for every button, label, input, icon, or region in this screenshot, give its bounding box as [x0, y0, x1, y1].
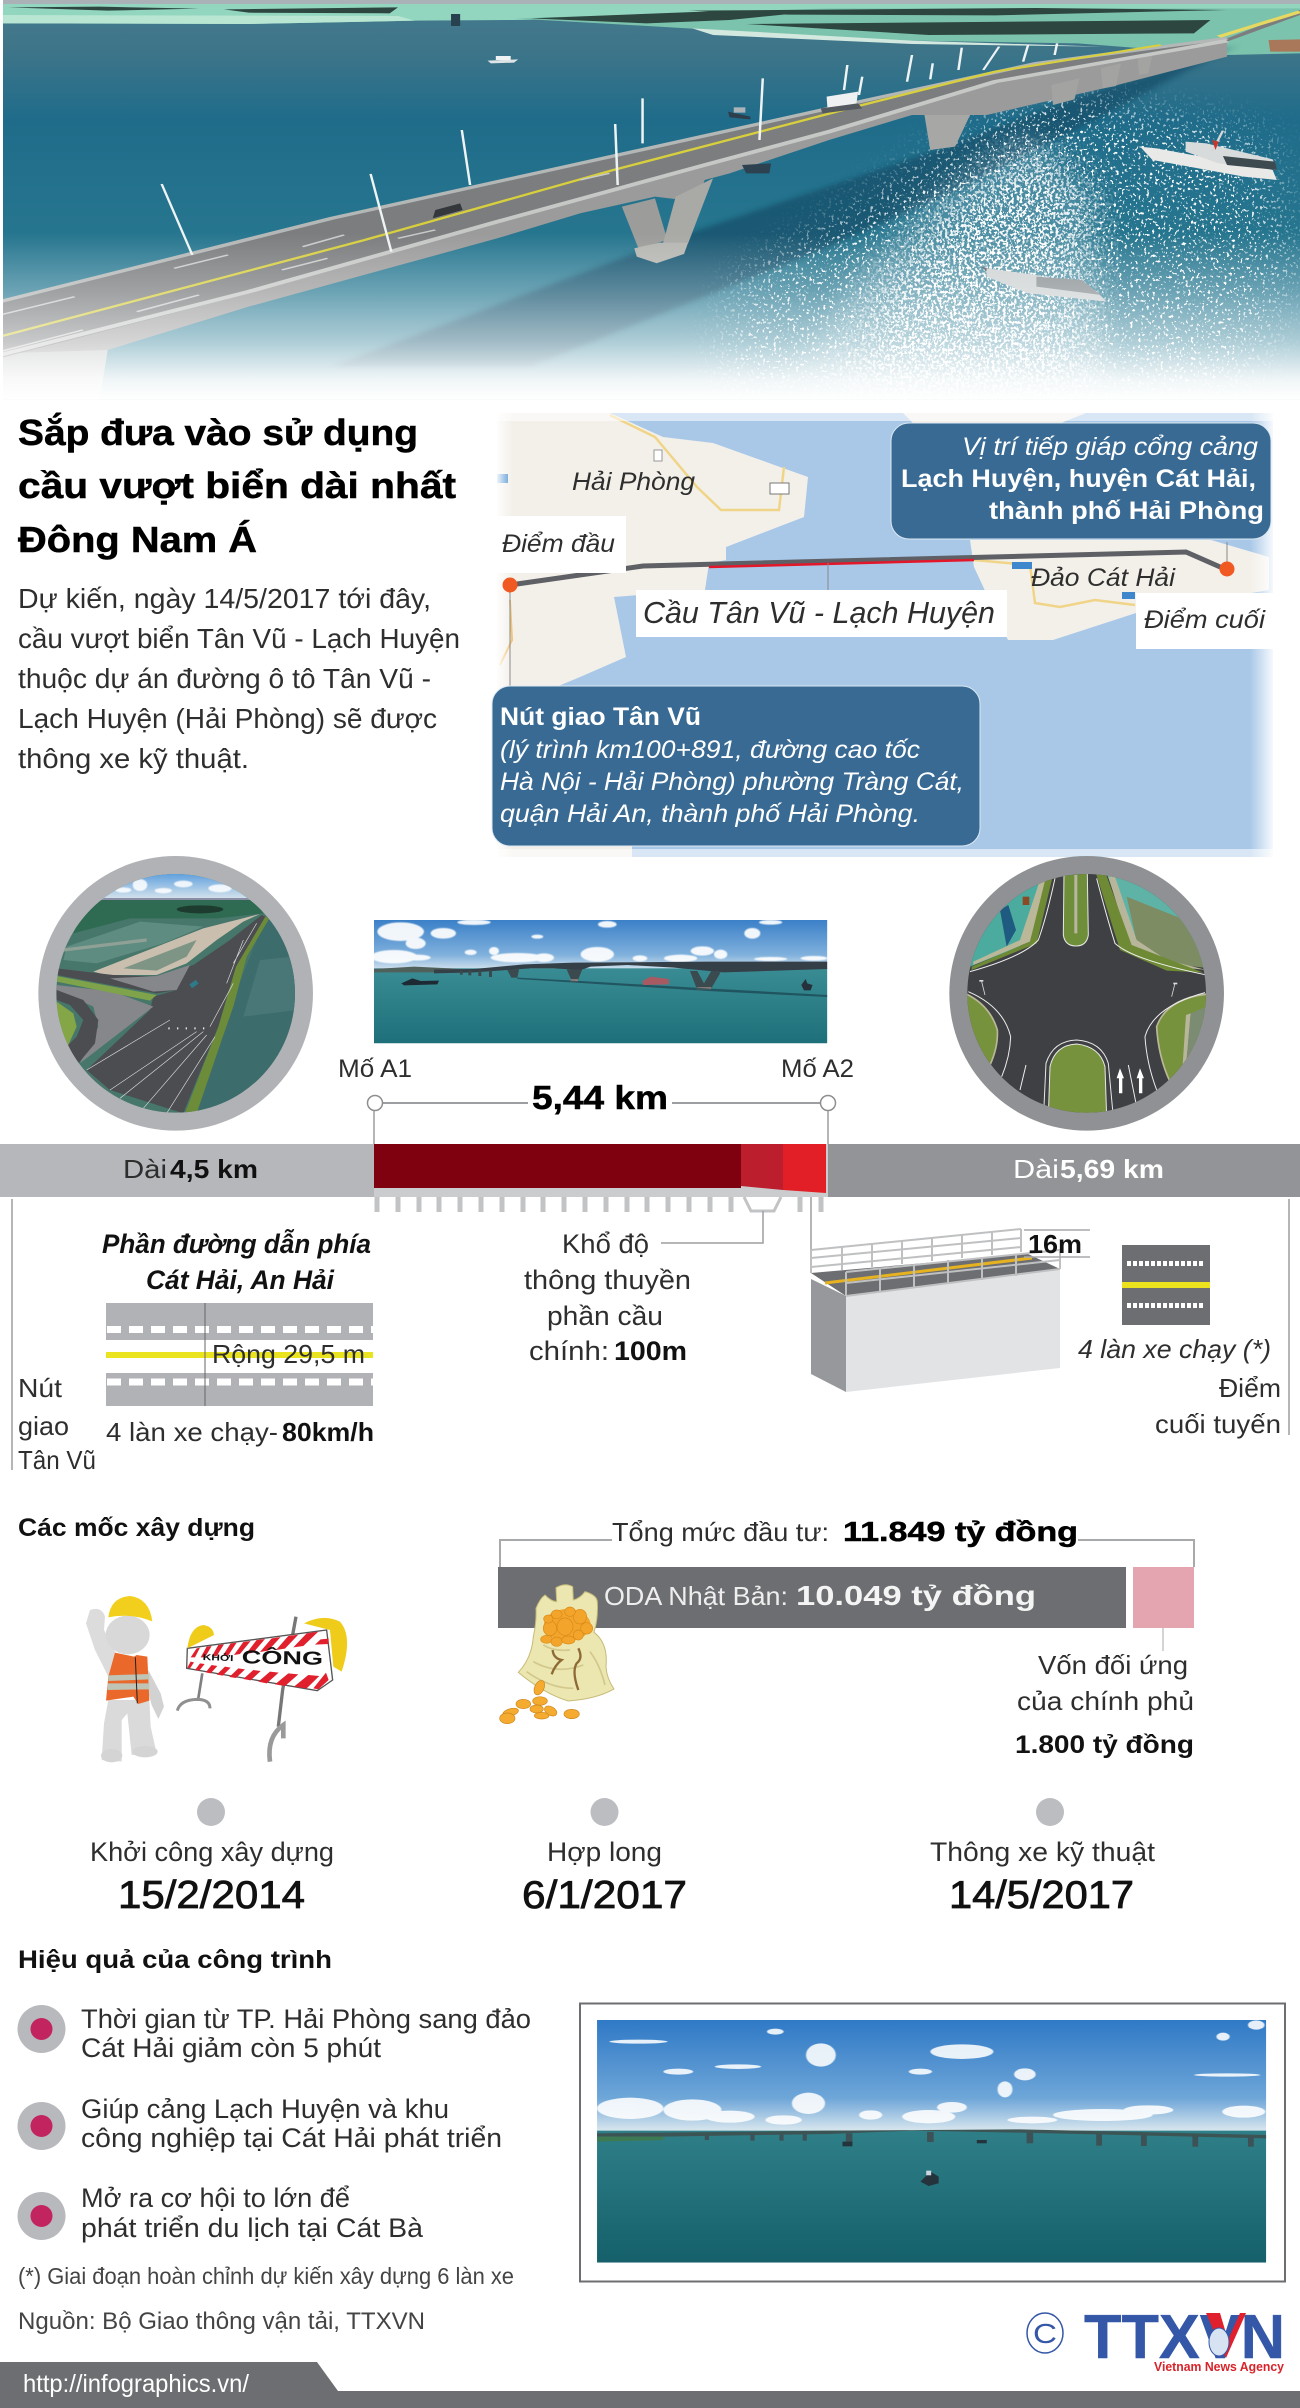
- footnote: (*) Giai đoạn hoàn chỉnh dự kiến xây dựng 6 làn xe: [18, 2263, 514, 2289]
- route line: [502, 542, 1234, 686]
- intro paragraph: thông xe kỹ thuật.: [18, 743, 249, 774]
- footer bar: http://infographics.vn/: [23, 2370, 249, 2398]
- title: [18, 411, 456, 560]
- milestone: technical opening: 14/5/2017: [949, 1874, 1134, 1917]
- milestone: closure: Hợp long: [547, 1837, 662, 1867]
- route bar: [0, 1144, 1300, 1197]
- approach road section: [102, 1228, 374, 1447]
- map labels: [495, 468, 1273, 649]
- benefit 3: [18, 2183, 424, 2243]
- map labels: Cầu Tân Vũ - Lạch Huyện: [643, 595, 995, 630]
- photo circle: intersection: [949, 856, 1224, 1131]
- navigation clearance note: phần cầu: [547, 1301, 663, 1331]
- label: end of route: Điểm: [1219, 1373, 1281, 1403]
- intro paragraph: [18, 583, 460, 774]
- label Mố A1, Mố A2: [338, 1055, 854, 1083]
- logo: TTXVN: Vietnam News Agency: [1154, 2359, 1285, 2374]
- hero photo: sea bridge: [0, 0, 1300, 400]
- intro paragraph: Lạch Huyện (Hải Phòng) sẽ được: [18, 703, 437, 734]
- bridge deck: [0, 10, 1300, 400]
- icon: construction sign KHỞI CÔNG: [177, 1617, 347, 1762]
- lamp posts: [162, 43, 1057, 255]
- label: end of route: [1155, 1373, 1281, 1439]
- label: start interchange: Tân Vũ: [18, 1445, 96, 1475]
- bridge piers: [377, 1197, 821, 1212]
- funding bar: government counterpart: của chính phủ: [1017, 1686, 1194, 1716]
- logo: TTXVN: TTXVN: [1084, 2303, 1285, 2372]
- investment total bracket: Tổng mức đầu tư:: [612, 1517, 829, 1547]
- label Mố A1, Mố A2: Mố A1: [338, 1055, 412, 1083]
- callout: Lạch Huyện port: thành phố Hải Phòng: [989, 497, 1264, 525]
- callout: Tân Vũ interchange: Nút giao Tân Vũ: [500, 703, 701, 731]
- milestone: closure: 6/1/2017: [522, 1874, 687, 1917]
- map labels: Hải Phòng: [572, 468, 695, 496]
- label: start interchange: Nút: [18, 1373, 63, 1403]
- callout: Tân Vũ interchange: quận Hải An, thành phố Hải Phòng.: [500, 800, 920, 828]
- icon: construction sign KHỞI CÔNG: KHỞI: [203, 1651, 234, 1663]
- callout: Lạch Huyện port: Lạch Huyện, huyện Cát Hải,: [901, 465, 1256, 493]
- icon: construction sign KHỞI CÔNG: CÔNG: [242, 1646, 323, 1669]
- funding bar: government counterpart: Vốn đối ứng: [1038, 1650, 1188, 1680]
- navigation clearance note: 100m: [614, 1336, 687, 1366]
- approach road section: 4 làn xe chạy-: [106, 1417, 278, 1447]
- milestone: technical opening: Thông xe kỹ thuật: [930, 1837, 1156, 1867]
- map labels: Điểm cuối: [1144, 606, 1267, 634]
- callout: Tân Vũ interchange: Hà Nội - Hải Phòng) phường Tràng Cát,: [500, 768, 964, 796]
- benefit 1: Cát Hải giảm còn 5 phút: [81, 2033, 382, 2063]
- side markers: [12, 1197, 1289, 1470]
- milestone: start of construction: Khởi công xây dựng: [90, 1837, 334, 1867]
- footer bar: [0, 2362, 1300, 2408]
- approach road section: 80km/h: [282, 1417, 374, 1447]
- benefit 3: Mở ra cơ hội to lớn để: [81, 2183, 350, 2213]
- label: start interchange: giao: [18, 1411, 69, 1441]
- intro paragraph: thuộc dự án đường ô tô Tân Vũ -: [18, 663, 431, 694]
- callout: Lạch Huyện port: Vị trí tiếp giáp cổng cảng: [962, 433, 1258, 461]
- funding bar: ODA: [498, 1567, 1126, 1628]
- route bar: 4,5 km: [170, 1154, 258, 1184]
- milestone: start of construction: 15/2/2014: [118, 1874, 305, 1917]
- title: Sắp đưa vào sử dụng: [18, 411, 418, 453]
- navigation clearance note: Khổ độ: [562, 1229, 649, 1259]
- approach road section: Phần đường dẫn phía: [102, 1228, 371, 1259]
- navigation clearance note: thông thuyền: [524, 1265, 691, 1295]
- heading: construction milestones: Các mốc xây dựng: [18, 1514, 255, 1542]
- benefit 2: Giúp cảng Lạch Huyện và khu: [81, 2094, 449, 2124]
- icon: worker: [86, 1596, 164, 1762]
- dimension: bridge length 5,44 km: [368, 1079, 836, 1144]
- funding bar: government counterpart: [1015, 1567, 1194, 1759]
- logo: TTXVN: C: [1033, 2318, 1057, 2349]
- benefit 1: Thời gian từ TP. Hải Phòng sang đảo: [81, 2004, 531, 2034]
- route bar: 5,69 km: [1060, 1154, 1164, 1184]
- route bar: Dài: [1013, 1154, 1059, 1184]
- main span road diagram: [1078, 1245, 1271, 1364]
- road diagram: Rộng 29,5 m: [212, 1339, 365, 1369]
- investment total bracket: 11.849 tỷ đồng: [843, 1516, 1078, 1547]
- bridge cross-section: 16m: [1028, 1229, 1082, 1259]
- navigation clearance note: [524, 1211, 763, 1366]
- label: start interchange: [18, 1373, 96, 1475]
- photo circle: approach road: [38, 856, 313, 1131]
- benefit 1: [18, 2004, 531, 2063]
- bridge photo: [371, 920, 827, 1043]
- intro paragraph: Dự kiến, ngày 14/5/2017 tới đây,: [18, 583, 431, 614]
- framed bridge photo: [580, 2004, 1285, 2282]
- benefit 2: công nghiệp tại Cát Hải phát triển: [81, 2123, 502, 2153]
- main span road diagram: 4 làn xe chạy (*): [1078, 1334, 1271, 1364]
- intro paragraph: cầu vượt biển Tân Vũ - Lạch Huyện: [18, 623, 460, 654]
- funding bar: ODA: ODA Nhật Bản:: [604, 1581, 788, 1611]
- benefit 3: phát triển du lịch tại Cát Bà: [81, 2213, 424, 2243]
- source: Nguồn: Bộ Giao thông vận tải, TTXVN: [18, 2308, 425, 2335]
- funding bar: ODA: 10.049 tỷ đồng: [796, 1580, 1036, 1611]
- map panel: [490, 413, 1273, 857]
- route bar: Dài: [123, 1154, 167, 1184]
- benefit 2: [18, 2094, 502, 2153]
- callout: Tân Vũ interchange: [492, 686, 980, 846]
- callout: Tân Vũ interchange: (lý trình km100+891, đường cao tốc: [500, 736, 921, 764]
- milestone: start of construction: [90, 1798, 334, 1917]
- funding bar: government counterpart: 1.800 tỷ đồng: [1015, 1731, 1194, 1759]
- title: cầu vượt biển dài nhất: [18, 465, 456, 506]
- vehicles and ships: [433, 14, 1277, 302]
- bridge cross-section: [811, 1229, 1090, 1392]
- milestone: technical opening: [930, 1798, 1156, 1917]
- map labels: Điểm đầu: [502, 530, 615, 558]
- callout: Lạch Huyện port: [891, 423, 1271, 539]
- road diagram: [106, 1303, 373, 1406]
- approach road section: Cát Hải, An Hải: [146, 1265, 334, 1295]
- title: Đông Nam Á: [18, 519, 257, 560]
- icon: money bag: [500, 1585, 614, 1724]
- map labels: Đảo Cát Hải: [1031, 564, 1177, 592]
- dimension: bridge length 5,44 km: 5,44 km: [532, 1079, 668, 1116]
- heading: project benefits: Hiệu quả của công trình: [18, 1946, 332, 1974]
- label: end of route: cuối tuyến: [1155, 1409, 1281, 1439]
- milestone: closure: [522, 1798, 687, 1917]
- navigation clearance note: chính:: [529, 1336, 609, 1366]
- investment total bracket: [500, 1516, 1194, 1567]
- label Mố A1, Mố A2: Mố A2: [781, 1055, 854, 1083]
